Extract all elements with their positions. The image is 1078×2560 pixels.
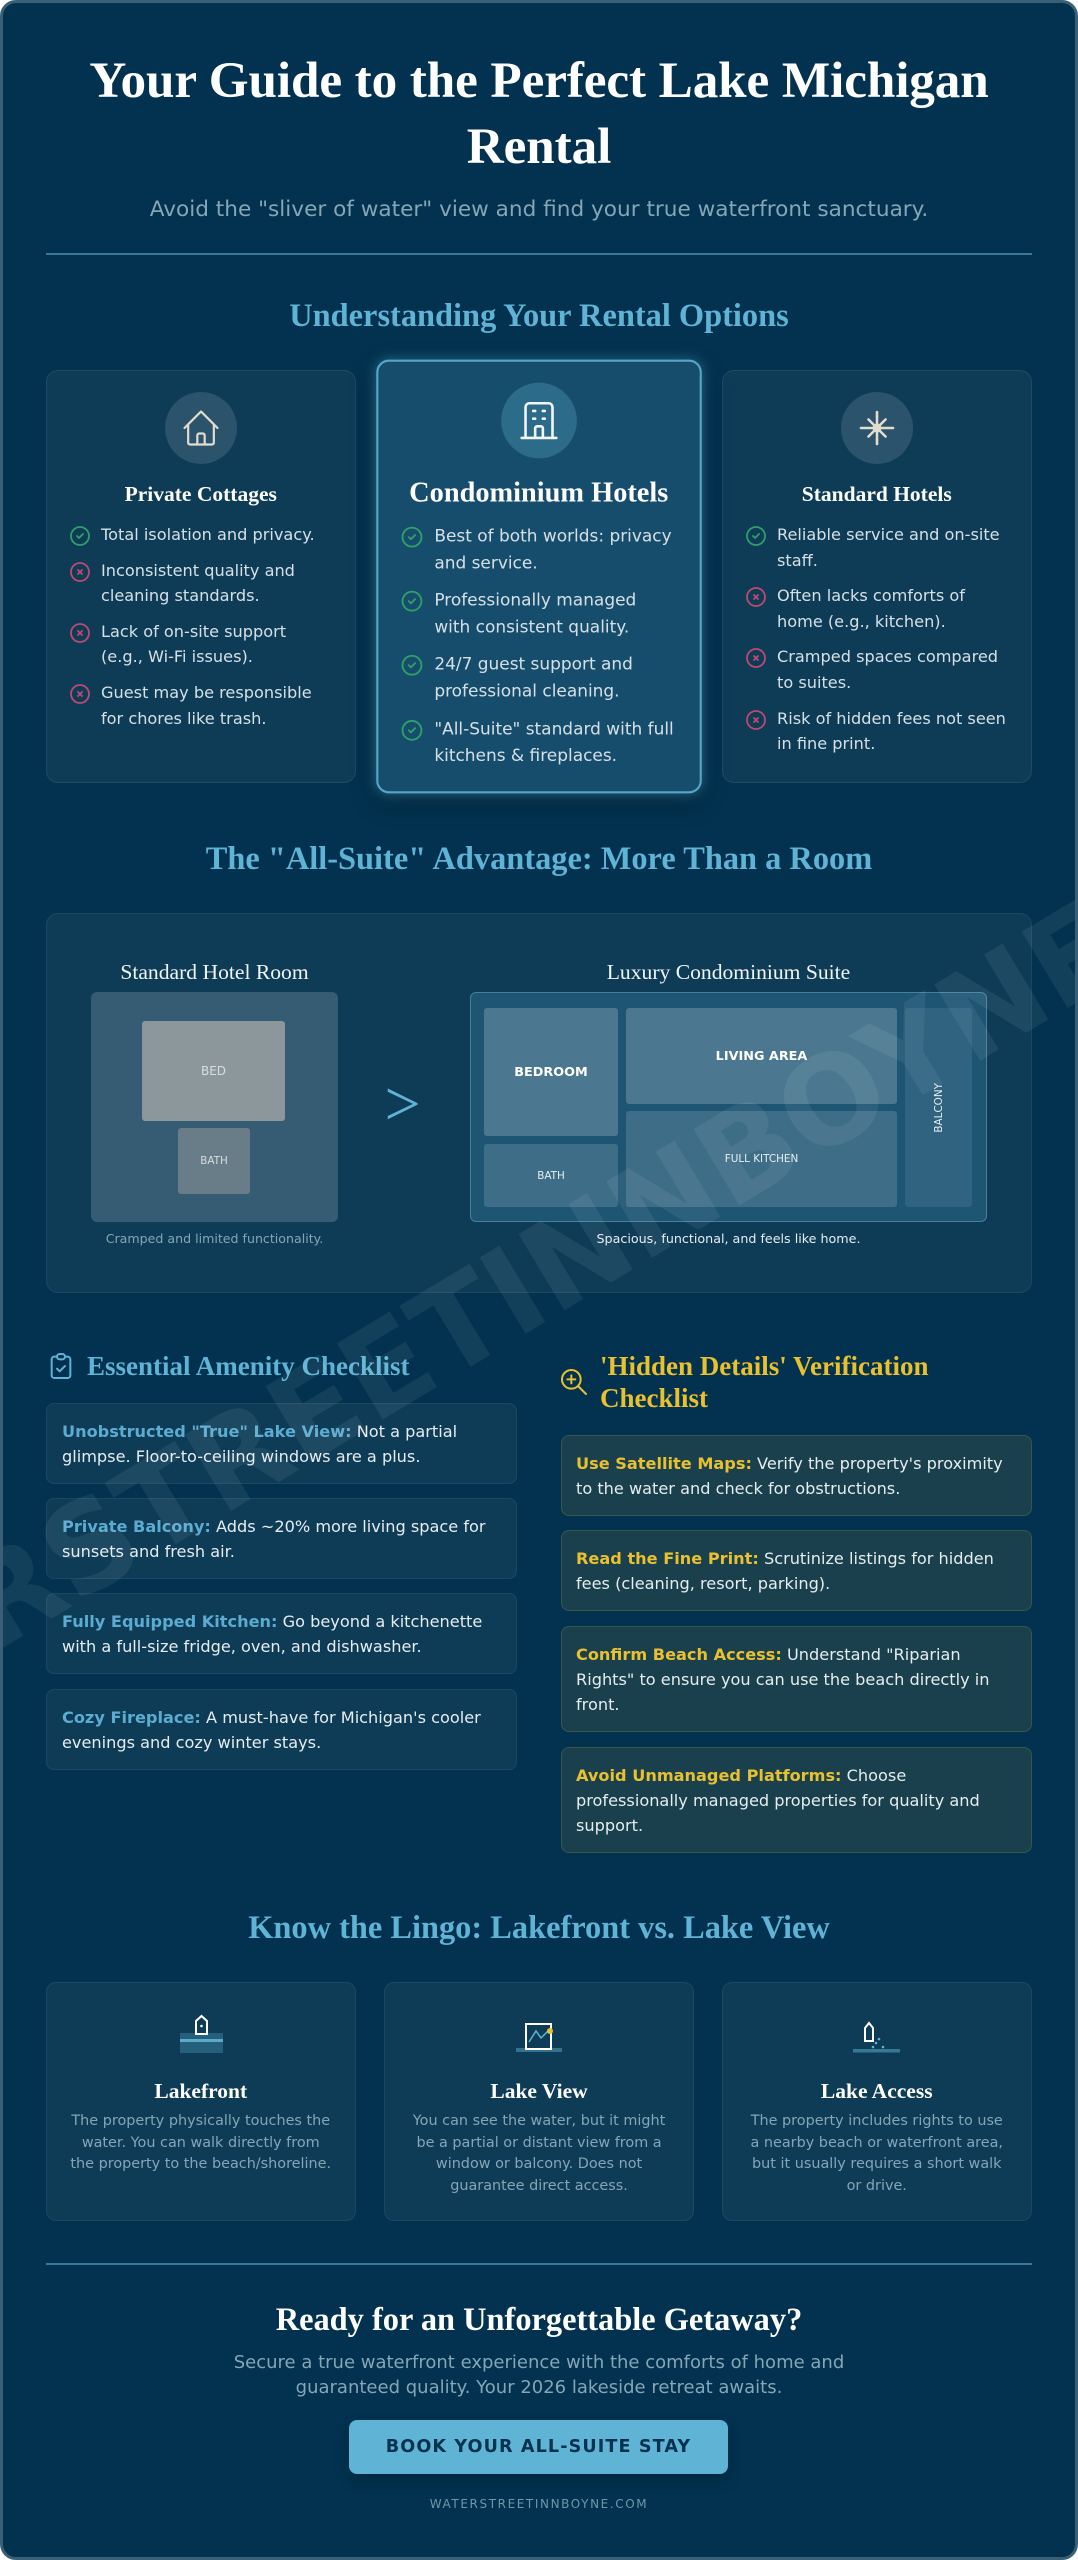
item: Use Satellite Maps: Verify the property's proximity: [576, 1454, 1003, 1473]
pros and cons list: staff.: [777, 551, 818, 570]
item: [561, 1626, 1032, 1732]
description: or drive.: [847, 2178, 907, 2194]
label: luxury suite: Luxury Condominium Suite: [607, 960, 850, 984]
label: standard room: Standard Hotel Room: [120, 960, 309, 984]
room: bedroom: BEDROOM: [514, 1064, 588, 1080]
room: bath: [484, 1144, 618, 1207]
button: [349, 2420, 728, 2474]
floor plan: standard room: [91, 992, 338, 1222]
description: [412, 2113, 665, 2194]
floor plan: luxury suite: [470, 992, 987, 1222]
room: bath: BATH: [537, 1170, 565, 1182]
item: glimpse. Floor-to-ceiling windows are a plus.: [62, 1447, 420, 1466]
icon: magnifier: [561, 1369, 587, 1395]
caption: luxury suite: Spacious, functional, and feels like home.: [596, 1231, 860, 1246]
room: living area: [626, 1008, 897, 1104]
call to action text: Secure a true waterfront experience with the comforts of home and: [234, 2352, 844, 2373]
description: guarantee direct access.: [450, 2178, 628, 2194]
arrow: greater than: >: [384, 1068, 421, 1139]
panel: lakefront: [46, 1982, 356, 2221]
benefits list: with consistent quality.: [435, 617, 630, 637]
item: [46, 1498, 517, 1579]
description: the property to the beach/shoreline.: [70, 2156, 331, 2172]
description: water. You can walk directly from: [82, 2135, 320, 2151]
room: full kitchen: FULL KITCHEN: [725, 1153, 798, 1165]
card heading: Condominium Hotels: [409, 476, 669, 508]
item: Fully Equipped Kitchen: Go beyond a kitchenette: [62, 1612, 482, 1631]
room: full kitchen: [626, 1111, 897, 1207]
description: The property physically touches the: [71, 2113, 330, 2129]
card heading: Lake Access: [821, 2079, 933, 2103]
item: [561, 1530, 1032, 1611]
room: bed: BED: [201, 1064, 226, 1078]
title: Your Guide to the Perfect Lake Michigan: [89, 52, 989, 109]
room: living area: LIVING AREA: [716, 1048, 807, 1064]
panel: standard hotels: [722, 370, 1032, 783]
pros and cons list: cleaning standards.: [101, 586, 260, 605]
button: BOOK YOUR ALL-SUITE STAY: [386, 2437, 691, 2457]
heading: all-suite advantage: The "All-Suite" Advantage: More Than a Room: [206, 841, 872, 877]
heading: lingo: Know the Lingo: Lakefront vs. Lake View: [248, 1910, 830, 1946]
description: but it usually requires a short walk: [752, 2156, 1001, 2172]
pros and cons list: Cramped spaces compared: [777, 647, 998, 666]
benefits list: Professionally managed: [435, 590, 637, 610]
card heading: Private Cottages: [125, 482, 277, 506]
panel: room comparison: [46, 913, 1032, 1293]
card heading: Standard Hotels: [802, 482, 952, 506]
card heading: Lake View: [490, 2079, 588, 2103]
description: The property includes rights to use: [751, 2113, 1003, 2129]
panel: amenity checklist: [50, 1351, 410, 1381]
pros and cons list: home (e.g., kitchen).: [777, 612, 946, 631]
room: balcony: BALCONY: [932, 1083, 944, 1132]
icon: clipboard: [50, 1353, 72, 1379]
heading: Essential Amenity Checklist: [87, 1351, 410, 1381]
item: with a full-size fridge, oven, and dishwasher.: [62, 1637, 422, 1656]
item: Confirm Beach Access: Understand "Riparian: [576, 1645, 961, 1664]
icon: lake view: [516, 2023, 562, 2052]
description: [750, 2113, 1003, 2194]
pros and cons list: Reliable service and on-site: [777, 525, 1000, 544]
room: bath: BATH: [200, 1155, 228, 1167]
pros and cons list: Guest may be responsible: [101, 683, 312, 702]
title: [89, 52, 989, 175]
panel: verification checklist: [561, 1351, 929, 1413]
caption: standard room: Cramped and limited functionality.: [106, 1231, 323, 1246]
call to action heading: Ready for an Unforgettable Getaway?: [276, 2302, 802, 2338]
pros and cons list: Inconsistent quality and: [101, 561, 295, 580]
item: Rights" to ensure you can use the beach directly in: [576, 1670, 990, 1689]
room: bed: [142, 1021, 285, 1121]
item: fees (cleaning, resort, parking).: [576, 1574, 830, 1593]
item: [46, 1689, 517, 1770]
benefits list: and service.: [435, 552, 538, 572]
card heading: Lakefront: [154, 2079, 247, 2103]
benefits list: [402, 526, 674, 765]
item: Read the Fine Print: Scrutinize listings for hidden: [576, 1549, 994, 1568]
heading: rental options: Understanding Your Rental Options: [289, 298, 789, 334]
item: evenings and cozy winter stays.: [62, 1733, 321, 1752]
item: front.: [576, 1695, 620, 1714]
item: [46, 1593, 517, 1674]
item: [561, 1747, 1032, 1853]
icon: lake access: [853, 2022, 900, 2052]
item: to the water and check for obstructions.: [576, 1479, 900, 1498]
call to action text: [234, 2352, 844, 2398]
panel: private cottages: [46, 370, 356, 783]
description: window or balcony. Does not: [436, 2156, 642, 2172]
item: Cozy Fireplace: A must-have for Michigan's cooler: [62, 1708, 481, 1727]
benefits list: kitchens & fireplaces.: [435, 745, 617, 765]
icon: sparkle: [841, 392, 913, 464]
heading: [600, 1351, 929, 1413]
heading: 'Hidden Details' Verification: [600, 1351, 929, 1381]
item: sunsets and fresh air.: [62, 1542, 235, 1561]
title: Rental: [467, 118, 611, 175]
benefits list: 24/7 guest support and: [435, 654, 633, 674]
pros and cons list: for chores like trash.: [101, 709, 266, 728]
footer url: WATERSTREETINNBOYNE.COM: [430, 2497, 648, 2511]
pros and cons list: Lack of on-site support: [101, 622, 286, 641]
heading: Checklist: [600, 1383, 708, 1413]
icon: building: [501, 383, 577, 458]
panel: lake view: [384, 1982, 694, 2221]
item: [46, 1403, 517, 1484]
benefits list: professional cleaning.: [435, 681, 620, 701]
item: Unobstructed "True" Lake View: Not a partial: [62, 1422, 457, 1441]
call to action text: guaranteed quality. Your 2026 lakeside retreat awaits.: [296, 2377, 782, 2398]
pros and cons list: (e.g., Wi-Fi issues).: [101, 647, 253, 666]
benefits list: "All-Suite" standard with full: [435, 718, 674, 738]
room: bath: [178, 1128, 250, 1194]
item: [561, 1435, 1032, 1516]
benefits list: Best of both worlds: privacy: [435, 526, 672, 546]
pros and cons list: [70, 525, 315, 728]
panel: condominium hotels (highlighted): [377, 360, 702, 793]
description: be a partial or distant view from a: [416, 2135, 662, 2151]
pros and cons list: Total isolation and privacy.: [101, 525, 315, 544]
description: a nearby beach or waterfront area,: [750, 2135, 1003, 2151]
pros and cons list: Risk of hidden fees not seen: [777, 709, 1006, 728]
description: [70, 2113, 331, 2172]
item: support.: [576, 1816, 643, 1835]
pros and cons list: [746, 525, 1006, 753]
item: Private Balcony: Adds ~20% more living space for: [62, 1517, 486, 1536]
panel: lake access: [722, 1982, 1032, 2221]
room: balcony: [905, 1008, 972, 1207]
pros and cons list: Often lacks comforts of: [777, 586, 965, 605]
pros and cons list: to suites.: [777, 673, 851, 692]
item: Avoid Unmanaged Platforms: Choose: [576, 1766, 906, 1785]
item: professionally managed properties for quality and: [576, 1791, 980, 1810]
pros and cons list: in fine print.: [777, 734, 875, 753]
description: You can see the water, but it might: [413, 2113, 665, 2129]
subtitle: Avoid the "sliver of water" view and find your true waterfront sanctuary.: [150, 197, 928, 222]
icon: house: [165, 392, 237, 464]
room: bedroom: [484, 1008, 618, 1136]
icon: lakefront: [180, 2014, 223, 2053]
